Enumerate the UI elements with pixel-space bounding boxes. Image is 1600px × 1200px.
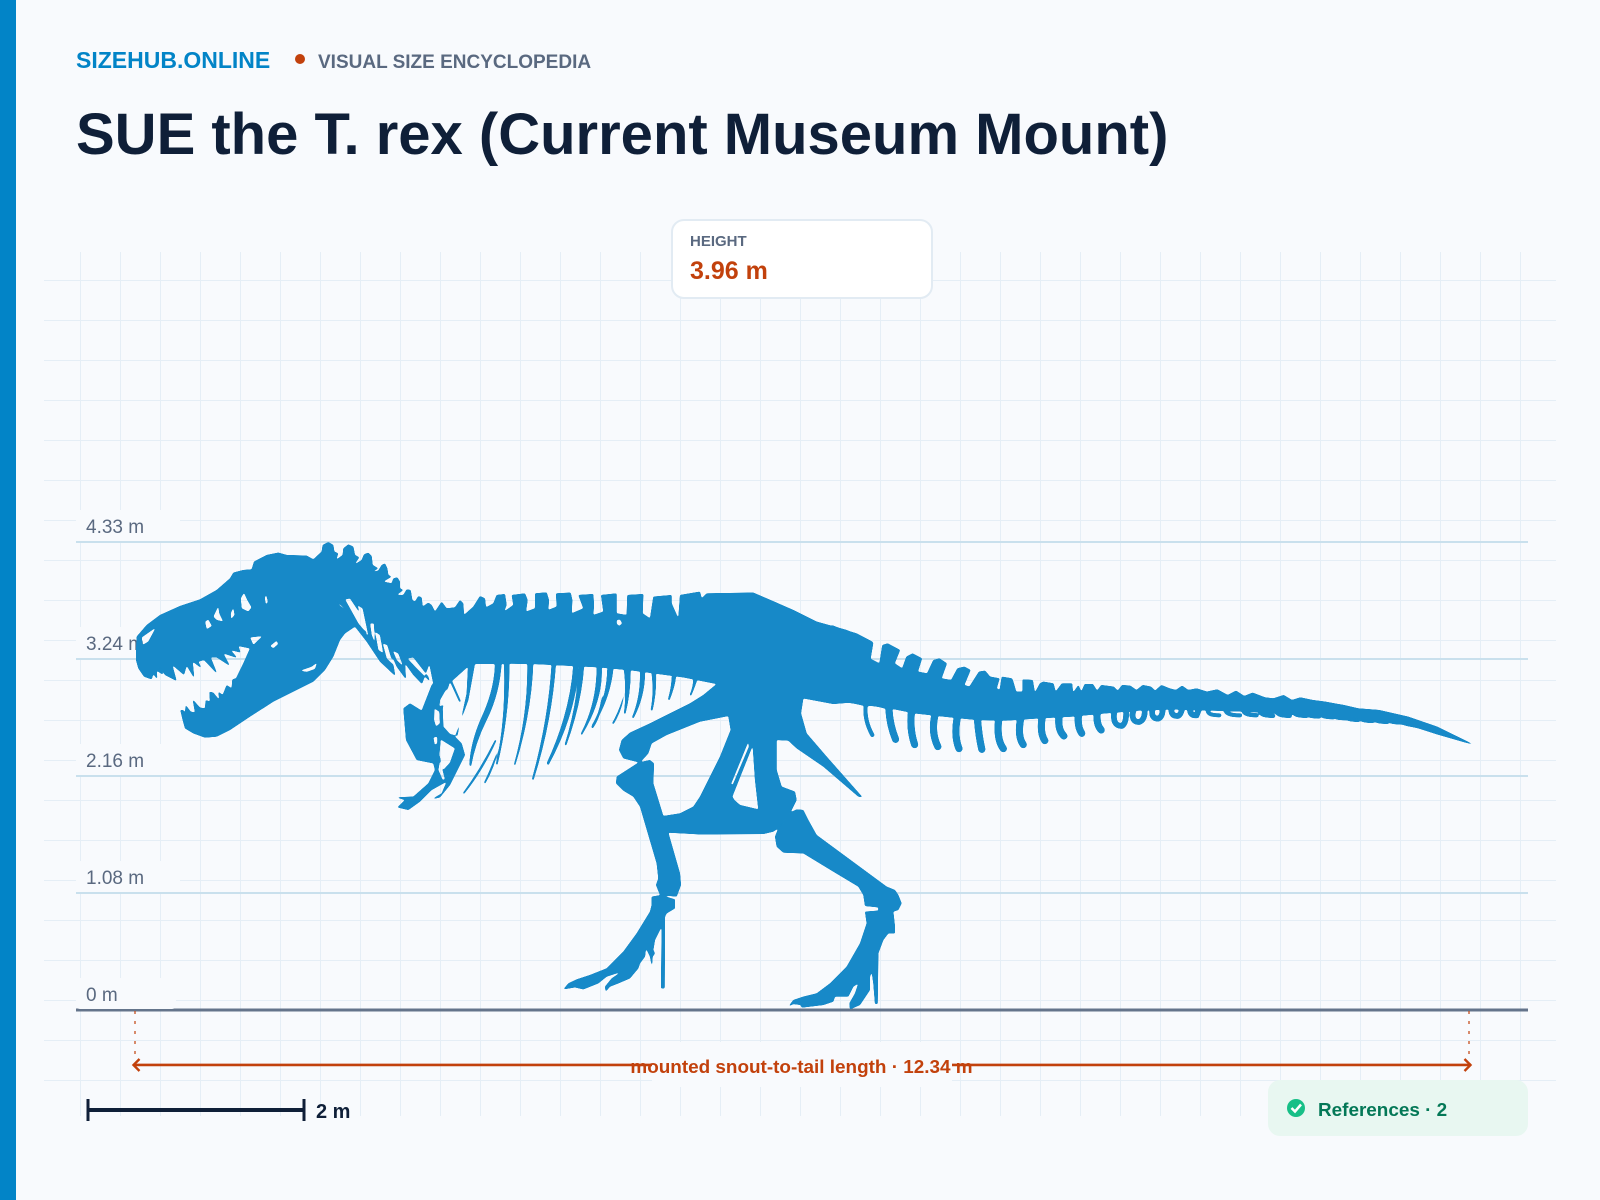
brand header — [76, 47, 591, 73]
brand header: SIZEHUB.ONLINE — [76, 47, 270, 73]
ribs — [450, 662, 697, 794]
tail vertebrae — [832, 625, 1475, 745]
height reference lines — [76, 510, 1528, 1010]
height axis labels — [86, 517, 144, 1006]
references badge: References · 2 — [1318, 1100, 1447, 1121]
height callout card — [672, 220, 932, 298]
height axis labels: 2.16 m — [86, 751, 144, 772]
front foot — [563, 895, 675, 992]
scale bar: 2 m — [316, 1101, 350, 1123]
accent sidebar — [0, 0, 16, 1200]
tail chevrons — [865, 705, 1414, 749]
references badge — [1268, 1080, 1528, 1136]
scale bar — [88, 1099, 350, 1123]
height axis labels: 3.24 m — [86, 634, 144, 655]
background grid — [44, 252, 1556, 1116]
title: SUE the T. rex (Current Museum Mount) — [76, 102, 1168, 167]
T. rex skeleton silhouette — [136, 542, 1475, 1009]
height axis labels: 4.33 m — [86, 517, 144, 538]
rear leg and foot — [775, 809, 902, 1009]
height callout card: 3.96 m — [690, 257, 768, 285]
height axis labels: 0 m — [86, 985, 118, 1006]
torso and pelvis — [493, 592, 888, 834]
skull and neck — [136, 542, 503, 738]
icon: check — [1287, 1099, 1305, 1117]
length measurement arrow: mounted snout-to-tail length · 12.34 m — [630, 1057, 973, 1078]
brand header: VISUAL SIZE ENCYCLOPEDIA — [318, 52, 591, 73]
length measurement arrow — [134, 1011, 1471, 1087]
front leg bones — [616, 760, 683, 897]
height axis labels: 1.08 m — [86, 868, 144, 889]
shoulder girdle and forelimb — [396, 663, 475, 810]
height callout card: HEIGHT — [690, 233, 747, 250]
